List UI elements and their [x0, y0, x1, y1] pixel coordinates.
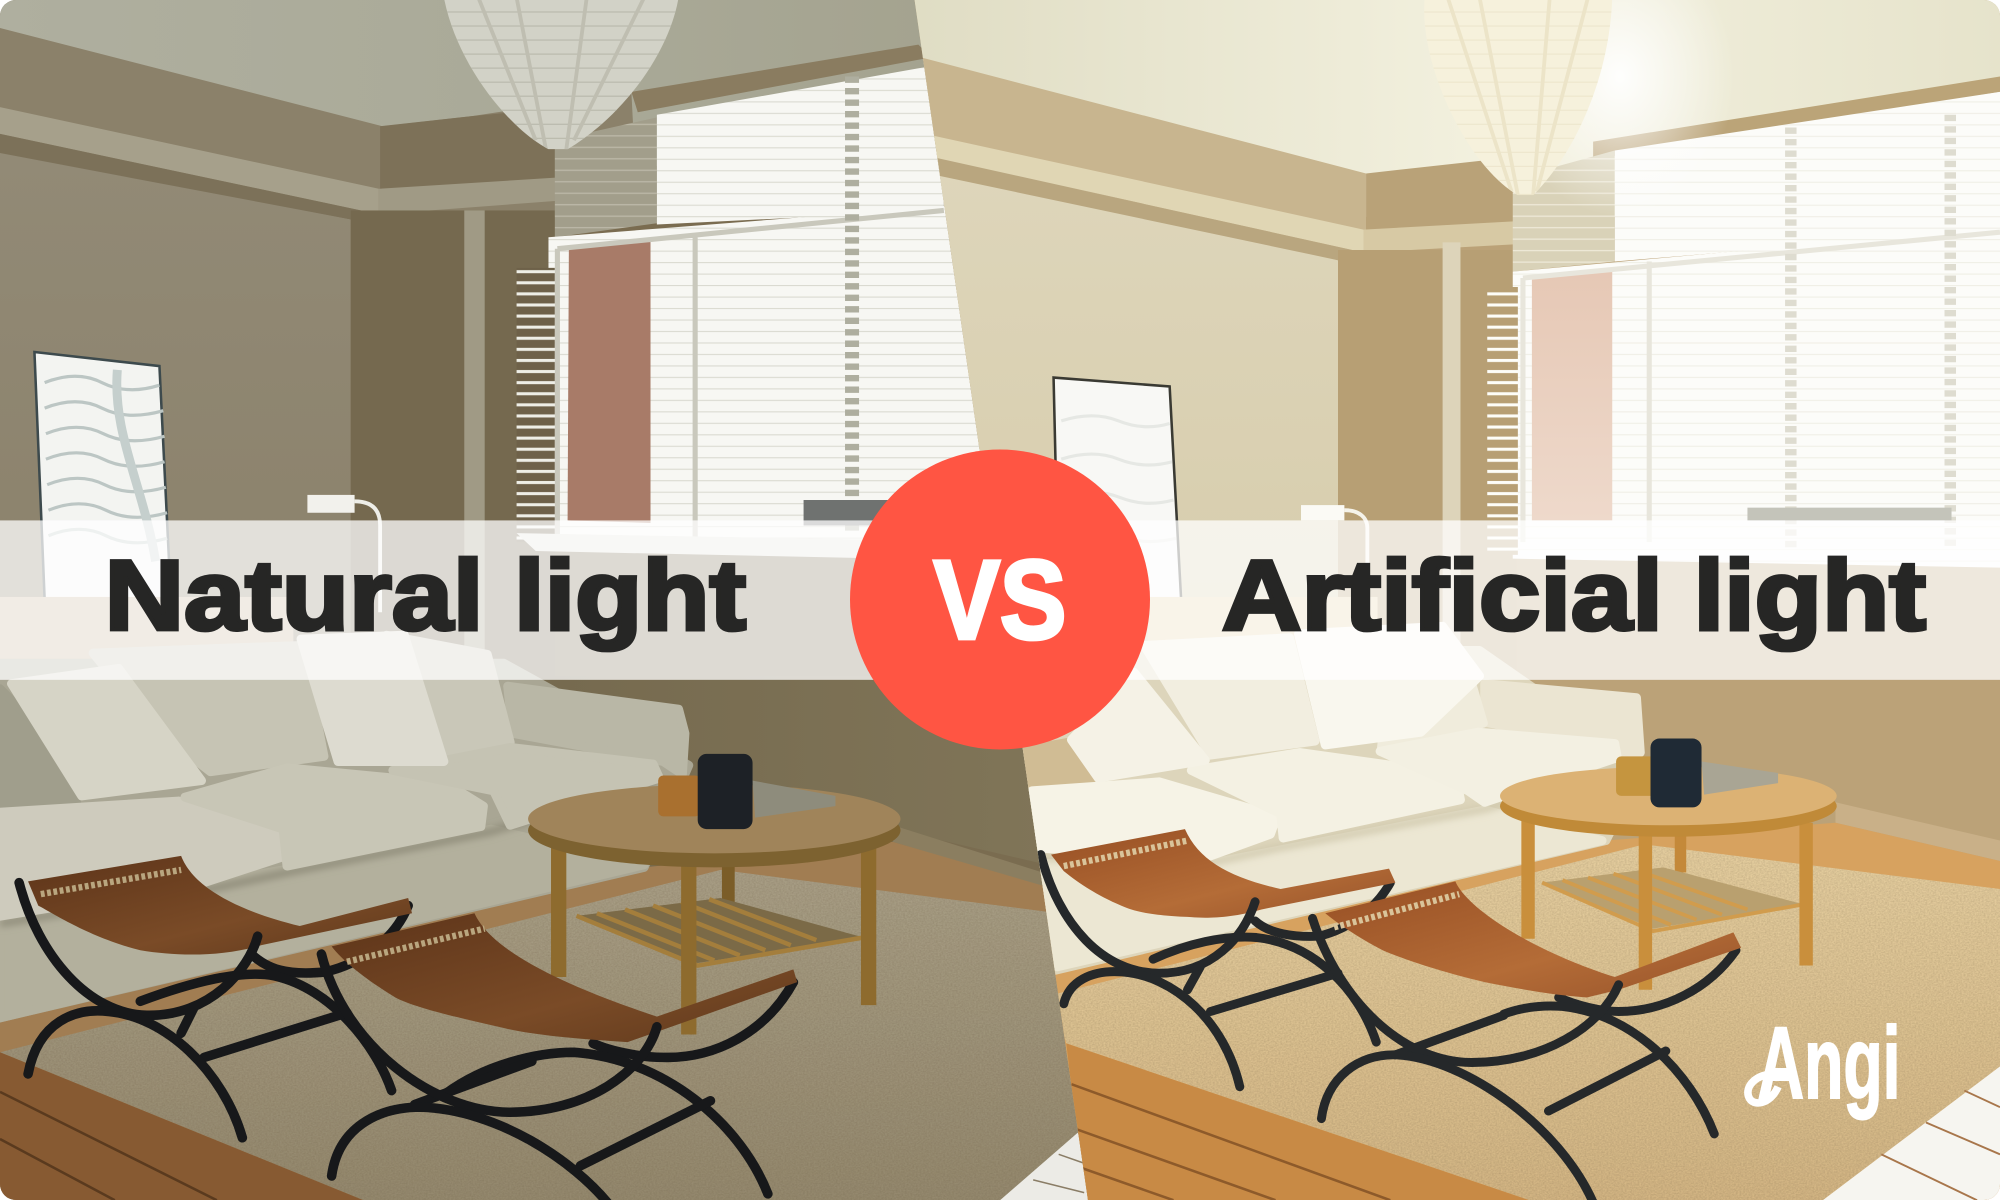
white floor corner	[1000, 1133, 1097, 1200]
sofa arm	[508, 686, 685, 774]
heading: Natural light: Natural light	[105, 540, 746, 651]
ceiling	[893, 0, 2000, 217]
sofa	[0, 635, 689, 1018]
coffee table	[528, 754, 901, 1034]
cabinet	[0, 597, 294, 658]
balcony rail	[804, 500, 893, 526]
sofa end	[1024, 737, 1097, 788]
sofa base	[1020, 651, 1644, 971]
desk lamp	[307, 495, 380, 612]
ceiling beam	[0, 107, 379, 214]
pillow left	[11, 668, 202, 796]
rug	[0, 870, 1097, 1200]
corner soffit	[380, 108, 555, 191]
ceiling	[0, 0, 1020, 166]
seat cushion right	[393, 747, 659, 825]
pillow right	[301, 635, 444, 761]
foreground floor	[0, 1052, 364, 1200]
column strip	[1443, 242, 1460, 663]
beam trim	[938, 158, 1364, 260]
paper lantern	[1409, 0, 1626, 202]
seat cushion left	[0, 801, 282, 917]
blind rail	[1593, 77, 2000, 159]
back wall	[1014, 748, 1039, 862]
baseboard	[1835, 802, 2000, 861]
beam return	[379, 178, 555, 210]
candle	[1616, 756, 1656, 796]
sofa arm	[1485, 684, 1640, 753]
left wall	[921, 147, 1338, 765]
back leg	[722, 855, 735, 906]
rug	[1052, 844, 2000, 1200]
seat cushion middle	[185, 768, 483, 866]
scene base	[893, 0, 2000, 1200]
cushion shadow	[1033, 765, 1622, 862]
column	[350, 210, 555, 452]
back cushion left	[1144, 638, 1315, 755]
pillow left	[1071, 672, 1205, 778]
blind stubs	[1487, 287, 1518, 555]
table rim	[528, 793, 901, 867]
back cushion right	[386, 635, 510, 768]
window frame	[557, 210, 944, 542]
foreground floor	[1066, 1043, 1529, 1200]
upper blinds bright	[657, 64, 944, 224]
beam trim	[0, 134, 379, 219]
ceiling beam	[931, 135, 1364, 253]
stool one	[1041, 829, 1395, 1087]
baseboard	[893, 828, 1042, 886]
back cushion right	[1381, 635, 1483, 749]
left wall	[0, 153, 351, 520]
sofa	[1020, 626, 1644, 971]
blind ladder	[847, 77, 858, 536]
back cushion left	[93, 645, 324, 772]
upper blinds grey	[555, 117, 657, 237]
upper blinds tan	[1513, 151, 1615, 272]
upper wall	[0, 28, 638, 217]
column strip	[464, 210, 485, 670]
corner soffit	[1366, 153, 1550, 230]
upper wall	[921, 57, 1366, 255]
candle	[658, 776, 700, 816]
table top	[528, 784, 901, 853]
pillow right	[1298, 626, 1480, 745]
stool two	[1312, 881, 1741, 1200]
ceiling glow	[1505, 0, 1735, 217]
seat cushion middle	[1191, 753, 1460, 838]
table rim	[1500, 776, 1837, 837]
brick wall outside	[568, 240, 651, 523]
blind rail	[631, 45, 931, 112]
shelf	[577, 898, 864, 963]
skirt	[0, 829, 644, 1018]
seat cushion right	[1380, 732, 1617, 802]
heading: Artificial light: Artificial light	[1222, 540, 1926, 651]
books	[1702, 761, 1778, 795]
badge circle	[850, 449, 1150, 749]
stool one	[19, 856, 412, 1138]
paper lantern	[434, 0, 689, 153]
cabinet	[1148, 597, 1378, 673]
translucent title band	[0, 520, 2000, 680]
column	[1338, 250, 1517, 709]
blind stubs	[517, 268, 555, 542]
scene base	[0, 0, 1122, 1200]
beam return	[1364, 219, 1550, 253]
floor	[0, 842, 1097, 1200]
shelf slats	[1542, 871, 1804, 931]
badge label: VS	[934, 536, 1066, 662]
shelf	[1542, 867, 1804, 929]
cushion shadow	[0, 781, 657, 923]
table top	[1500, 767, 1837, 825]
vase	[698, 754, 753, 829]
wall art	[1054, 378, 1181, 599]
logo swash	[1748, 1074, 1778, 1103]
sofa end	[0, 689, 77, 829]
books	[753, 781, 835, 818]
window frame	[1523, 232, 2000, 542]
desk lamp	[1301, 505, 1367, 612]
vase	[1651, 739, 1702, 807]
upper blinds bright	[1615, 92, 2000, 261]
logo: Angi	[1748, 1006, 1901, 1120]
lower window	[1513, 227, 2000, 568]
floor	[918, 823, 2000, 1200]
versus badge	[850, 449, 1150, 749]
brick wall outside	[1532, 270, 1612, 520]
back leg	[1675, 829, 1686, 872]
panel: artificial light room	[893, 0, 2000, 1200]
coffee table	[1500, 739, 1837, 990]
skirt	[1042, 810, 1602, 967]
stool two	[321, 913, 797, 1200]
window sill	[516, 533, 858, 558]
wall art	[34, 352, 171, 599]
logo wordmark: Angi	[1758, 1006, 1901, 1120]
blind ladders	[1791, 115, 1950, 548]
balcony rail	[1747, 508, 1952, 520]
panel: natural light room	[0, 0, 1122, 1200]
white floor corner	[1823, 1066, 2000, 1200]
sofa base	[0, 663, 689, 1018]
legs	[1528, 816, 1806, 990]
legs	[559, 842, 869, 1034]
lower window	[548, 204, 1008, 551]
shelf slats	[577, 899, 864, 966]
seat cushion left	[1032, 782, 1277, 856]
back wall	[1481, 676, 2000, 848]
